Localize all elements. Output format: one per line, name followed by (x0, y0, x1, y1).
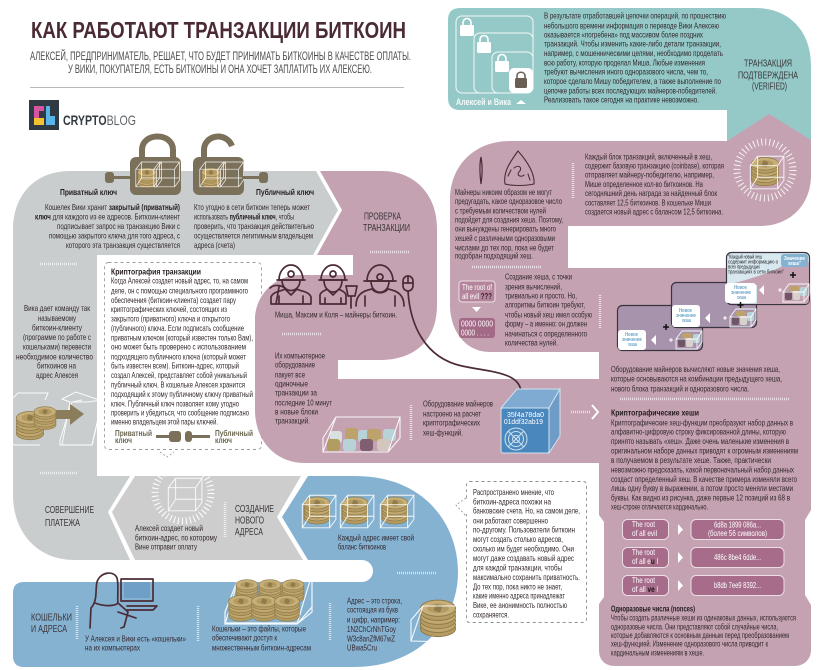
heading: transaction verified: ТРАНЗАКЦИЯ (744, 58, 792, 70)
text: hash creation (505, 273, 592, 348)
text: address string: UBwa5Cru (347, 644, 377, 653)
icon: root to zeros: 0000 0000 (461, 320, 493, 328)
text: verified explanation: транзакций. Чтобы изменить какие-либо детали транзакции, (544, 40, 721, 49)
heading: create new address (235, 503, 274, 538)
chart: hash chain: хеша (682, 318, 691, 324)
text: wallets on computers: У Алексея и Вики есть «кошельки» (85, 635, 186, 644)
text: miner hardware packs: последние 10 минут (275, 398, 332, 407)
chart: hash chain: Значение (784, 256, 805, 262)
panel: gray payment band (13, 171, 338, 560)
chart: hash chain: хеша" (788, 261, 802, 267)
text: equipment configured: хеш-функций. (423, 429, 463, 438)
text: miner hardware packs: транзакции за (275, 389, 317, 398)
text: verified explanation: Реализовать такое сегодня на практике невозможно. (544, 96, 699, 105)
text: miners guess: числами до тех пор, пока не будет (455, 243, 554, 252)
chart: hash chain: Новое (679, 308, 692, 314)
callout: misconception (456, 482, 586, 622)
heading: create new address: АДРЕСА (235, 526, 263, 538)
text: miner hardware packs: оборудование (275, 361, 315, 370)
heading: payment: ПЛАТЕЖА (45, 517, 80, 529)
text: hash creation: алгоритмы биткоин требуют, (505, 301, 585, 310)
chart: hash chain: транзакциях в сети биткоин" (728, 270, 784, 276)
text: nonces: кардинальным изменениям в хеше. (611, 648, 704, 657)
callout: misconception: могут создать столько адресов, (473, 535, 563, 544)
icon: closed lock with private key (105, 136, 181, 195)
logo: cryptoblog (29, 100, 136, 130)
card dashed border: cryptography (104, 262, 262, 450)
text: equipment configured (423, 400, 493, 438)
heading: verification (363, 210, 410, 234)
text: new address (135, 524, 218, 552)
callout: misconception: они работают совершенно (473, 516, 548, 525)
text: new address: биткоин-адрес, по которому (135, 534, 218, 543)
subtitle: У ВИКИ, ПОКУПАТЕЛЯ, ЕСТЬ БИТКОИНЫ И ОНА ХОЧЕТ ЗАПЛАТИТЬ ИХ АЛЕКСЕЮ. (68, 64, 372, 76)
chart: hash chain: значение (622, 337, 642, 343)
icon: mining chip cube: 01ddf32ab19 (504, 419, 543, 426)
text: cryptography card (111, 266, 253, 427)
text: private key: которого эта транзакция существляется (66, 241, 180, 250)
text: cryptography card: обеспечения (биткоин-клиента) создает пару (111, 296, 237, 305)
chart: hash chain: значение (731, 290, 751, 296)
text: cryptography card: подходящего публичного ключа (который может (111, 352, 246, 361)
text: verified explanation: цепочке работы всех последующих майнеров-победителей. (544, 86, 717, 95)
text: equipment computes (611, 365, 782, 394)
text: cryptography card: приватным ключом (который известен только Вам), (111, 334, 253, 343)
text: private key: Приватный ключ (60, 188, 117, 197)
heading: wallets: И АДРЕСА (31, 623, 67, 635)
text: miners guess: хешей с различными одноразовыми (455, 234, 555, 243)
icon: key pair: Приватный (115, 429, 152, 438)
text: verified explanation: которое сделало Мишу победителем, а также выполнение по (544, 77, 721, 86)
text: miners guess: подойдет для создания хеша. Поэтому, (455, 216, 563, 225)
text: private key: помощью закрытого ключа для того адреса, с (49, 232, 180, 240)
callout: misconception: максимально сохранить приватность. (473, 573, 580, 582)
text: miner hardware packs: в новые блоки (275, 408, 318, 417)
icon: coins moving to new address (8, 392, 102, 445)
text: cryptography card: именно владельцем этой пары ключей. (111, 418, 218, 427)
text: nonces: Одноразовые числа (nonces) (611, 604, 695, 614)
icon: root to zeros (459, 281, 495, 338)
text: coinbase: отправляет майнеру-победителю, например, (585, 171, 714, 180)
text: cryptography card: Когда Алексей создает новый адрес, то, на самом (111, 277, 248, 286)
callout: misconception: какие именно адреса принадлежат (473, 592, 565, 601)
text: vika command: биткоин-клиенту (32, 323, 83, 332)
text: coinbase: содержит базовую транзакцию (coinbase), которая (585, 162, 724, 171)
text: public key: использовать публичный ключ, чтобы (194, 212, 294, 222)
icon: root to zeros: all evil ??? (462, 292, 492, 301)
chart: hash chain: "Каждый новый хеш (728, 254, 762, 260)
text: cryptography card: подходящий к этому публичному ключу приватный (111, 390, 253, 399)
callout: misconception: по-другому. Пользователи биткоин (473, 526, 575, 535)
chart: hash examples: of all evil (632, 529, 657, 538)
text: miners guess: подобран подходящий хеш. (455, 251, 533, 260)
text: public key: осуществляется легитимным владельцем (194, 232, 313, 240)
text: cryptography card: закрытого (приватного) ключа и открытого (111, 314, 230, 323)
text: new address: Алексей создает новый (135, 524, 203, 533)
icon: mining chip cube: 35f4a78da0 (507, 412, 544, 419)
text: miners caption: Миша, Максим и Коля – майнеры биткоин. (275, 311, 397, 320)
callout: misconception: могут даже создавать новый адрес (473, 554, 574, 563)
text: miner hardware packs: одиночные (275, 380, 308, 389)
text: cryptography card: публичный ключ. В кошельке Алексея хранится (111, 380, 245, 389)
chart: hash examples: 6d8a 1899 086a... (714, 520, 761, 530)
text: vika command: необходимое количество (16, 352, 93, 361)
text: address string: 1N2ChCrNhTGoy (347, 625, 397, 634)
text: miners guess: они вынуждены генерировать много (455, 225, 556, 234)
callout: misconception: До тех пор, пока никто не знает, (473, 582, 562, 591)
text: vika command: Вика дает команду так (24, 304, 90, 313)
callout pointer (160, 452, 174, 457)
icon: miners (270, 265, 404, 308)
text: vika command: называемому (38, 314, 77, 323)
text: cryptographic hashes (611, 407, 798, 512)
callout: misconception: сохраняется. (473, 610, 509, 619)
text: coinbase (585, 152, 724, 217)
icon: wallet file coins (225, 574, 312, 624)
icon: key pair: ключ (115, 436, 132, 445)
text: wallets are files (212, 625, 311, 653)
text: cryptography card: деле, он с помощью специального программного (111, 286, 248, 295)
text: address string (347, 596, 402, 653)
text: wallets are files: множественным биткоин-адресам (212, 644, 311, 653)
text: wallets on computers (85, 635, 186, 653)
icon: sunburst empty cube (155, 462, 211, 521)
text: verified explanation (544, 12, 726, 105)
heading: verification: ПРОВЕРКА (364, 210, 401, 222)
text: each address balance: баланс биткоинов (338, 543, 386, 552)
text: vika command (16, 304, 93, 380)
callout: misconception: сколько им будет необходимо. Они (473, 545, 574, 554)
chart: hash chain: всех предыдущих (728, 264, 760, 270)
text: hash creation: количества нулей. (505, 339, 558, 348)
text: miner hardware packs: Их компьютерное (275, 351, 325, 360)
text: coinbase: составляет 12,5 биткоинов. В кошельке Миши (585, 199, 711, 208)
text: address string: W3c8anZfM67wZ (347, 635, 395, 644)
icon: key pair: Публичный (215, 428, 253, 438)
text: vika command: (программе по работе с (23, 333, 91, 342)
heading: wallets: КОШЕЛЬКИ (31, 612, 72, 624)
heading: transaction verified: (VERIFIED) (752, 80, 787, 92)
text: cryptographic hashes: хеш-строке отличаются кардинально. (611, 503, 708, 512)
text: verified explanation: небольшого времени информация о переводе Вики Алексею (544, 21, 719, 30)
heading: create new address: СОЗДАНИЕ (235, 503, 274, 515)
text: hash creation: чтобы новый хеш имел особую (505, 311, 592, 320)
chart: hash examples: of all eu l (632, 557, 658, 566)
icon: mouse and cable (403, 276, 521, 392)
heading: create new address: НОВОГО (235, 514, 264, 526)
text: public key: проверить, что транзакция действительно (194, 222, 314, 231)
text: hash creation: форму – а именно: он должен (505, 320, 587, 329)
heading: transaction verified (738, 58, 798, 92)
chart: hash chain: хеша (628, 342, 637, 348)
chart: hash examples: (более 56 символов) (708, 529, 767, 538)
icon: three coin balances (302, 495, 414, 528)
panel: mauve hashes (450, 114, 811, 666)
chart: hash examples: The root (632, 576, 656, 585)
text: address string: Адрес – это строка, (347, 596, 402, 605)
arrow: to hashes (592, 405, 598, 419)
text: cryptography card: проверить и убедиться, что сообщение подписано (111, 408, 249, 417)
text: equipment configured: Оборудование майнеров (423, 400, 493, 409)
icon: root to zeros: The root of (462, 283, 493, 292)
text: equipment computes: нового блока транзакций и одноразового числа. (611, 385, 749, 394)
chart: hash examples: of all ve l (632, 585, 658, 594)
text: private key: подписывает запрос на транзакцию Вики с (57, 222, 180, 231)
chart: hash chain: хеша (737, 295, 746, 301)
text: miners guess (455, 188, 563, 260)
text: address string: и цифр, например: (347, 616, 400, 625)
text: hash creation: Создание хеша, с точки (505, 273, 572, 282)
callout: misconception: Вике, ее анонимность полностью (473, 601, 567, 610)
text: each address balance (338, 534, 414, 552)
icon: key pair (115, 428, 253, 445)
chart: hash chain: Новое (625, 332, 638, 338)
text: verified explanation: всю работу, которую проделал Миша. Любые изменения (544, 58, 705, 67)
heading: payment: СОВЕРШЕНИЕ (45, 504, 94, 516)
chart: hash chain: Новое (734, 285, 747, 291)
text: verified explanation: например, с мошенническими целями, необходимо проделать (544, 49, 723, 58)
text: miner hardware packs: транзакций. (275, 417, 310, 426)
text: miner hardware packs (275, 351, 332, 426)
icon: block of coloured coins (323, 417, 400, 452)
text: miners guess: Майнеры никоим образом не могут (455, 188, 552, 197)
panel: teal verified (448, 8, 811, 145)
text: cryptography card: создал Алексей, представляет собой уникальный (111, 371, 247, 380)
text: public key: Публичный ключ (256, 187, 314, 197)
icon: open lock with public key (193, 137, 268, 195)
text: cryptography card: ключ. Публичный ключ позволяет кому угодно (111, 399, 239, 408)
icon: coin reward sunburst (737, 142, 793, 198)
text: wallets are files: Кошельки – это файлы, которые (212, 625, 306, 634)
text: hash creation: начинаться с определенного (505, 330, 587, 339)
text: cryptography card: быть известен всем). Биткоин-адрес, который (111, 362, 239, 371)
callout: misconception: для каждой транзакции, чтобы (473, 563, 562, 572)
text: vika command: биткоинов на (37, 362, 76, 371)
chart: hash examples: The root (632, 548, 656, 557)
callout: misconception: банковские счета. Но, на самом деле, (473, 507, 580, 516)
chart: hash examples: b8db 7ee9 8392... (714, 581, 761, 590)
heading: wallets (31, 612, 72, 635)
text: cryptography card: Криптография транзакции (111, 266, 201, 276)
chart: hash examples: 486c 8be4 6dde... (714, 553, 761, 562)
text: miners guess: предугадать, какое одноразовое число (455, 197, 562, 206)
callout: misconception: биткоин-адреса похожи на (473, 497, 551, 506)
panel: mauve verification (255, 171, 620, 463)
text: each address balance: Каждый адрес имеет свой (338, 534, 414, 543)
text: cryptography card: (публичного) ключа. Если подписать сообщение (111, 324, 244, 333)
text: coinbase: создается новый адрес с балансом 12,5 биткоина. (585, 208, 723, 217)
text: private key: Кошелек Вики хранит закрытый (приватный) (45, 203, 180, 212)
text: nonces (611, 604, 796, 657)
chart: hash chain: содержит информацию о (728, 260, 778, 266)
text: wallets on computers: на их компьютерах (85, 644, 140, 653)
chart: hash chain: значение (676, 313, 696, 319)
text: coinbase: сегодняшний день награда за найденный блок (585, 189, 717, 198)
icon: address coin (411, 600, 458, 642)
text: coinbase: Каждый блок транзакций, включенный в хеш, (585, 152, 712, 161)
subtitle: АЛЕКСЕЙ, ПРЕДПРИНИМАТЕЛЬ, РЕШАЕТ, ЧТО БУДЕТ ПРИНИМАТЬ БИТКОИНЫ В КАЧЕСТВЕ ОПЛАТЫ. (30, 50, 411, 63)
text: coinbase: Мише определенное кол-во биткоинов. На (585, 180, 703, 189)
heading: payment (45, 504, 94, 529)
text: equipment configured: криптографических (423, 419, 480, 428)
text: vika command: адрес Алексея (36, 371, 78, 380)
text: public key: Кто угодно в сети биткоин теперь может (194, 203, 310, 212)
text: hash creation: тривиально и просто. Но, (505, 292, 577, 301)
panel: blue wallets (13, 476, 458, 667)
chart: hash chain (618, 252, 810, 350)
heading: verification: ТРАНЗАКЦИИ (363, 222, 410, 234)
text: address string: состоящая из букв (347, 606, 398, 615)
icon: nested locks (456, 16, 533, 107)
text: miners guess: с требуемым количеством нулей (455, 206, 546, 215)
icon: key pair: ключ (215, 436, 232, 445)
text: cryptography card: криптографических ключей, состоящих из (111, 305, 227, 314)
chart: hash examples (622, 520, 784, 596)
text: cryptographic hashes: в получаемом в результате хеше. Также, практически (611, 456, 771, 465)
panel: gray new address chevron (112, 476, 303, 560)
text: verified explanation: оказывается «погребена» под массивом более поздних (544, 30, 703, 39)
chart: hash examples: The root (632, 520, 656, 529)
text: public key (194, 187, 314, 250)
title: КАК РАБОТАЮТ ТРАНЗАКЦИИ БИТКОИН (31, 17, 406, 43)
text: private key: ключ для каждого из ее адресов. Биткоин-клиент (35, 212, 180, 222)
text: cryptography card: оно может быть проверено с использованием (111, 343, 246, 352)
text: verified explanation: требуют вычисления иного одноразового числа, чем то, (544, 67, 708, 76)
text: new address: Вине отправит оплату (135, 543, 198, 552)
text: equipment configured: настроено на расчет (423, 410, 481, 419)
logo: cryptoblog: CRYPTOBLOG (63, 112, 136, 128)
icon: mining chip cube (501, 389, 560, 453)
text: private key (35, 188, 180, 250)
text: vika command: кошельками) перевести (23, 342, 91, 351)
subtitle (30, 50, 411, 76)
icon: nested locks: Алексей и Вика (456, 97, 512, 107)
callout: misconception: Распространено мнение, что (473, 488, 554, 497)
icon: woman at laptop (90, 573, 157, 628)
text: public key: адреса (счета) (194, 241, 235, 250)
text: hash creation: зрения вычислений, (505, 282, 562, 291)
text: miner hardware packs: пакует все (275, 370, 305, 379)
icon: needle and haystack (480, 151, 534, 186)
text: cryptographic hashes: Криптографические хеши (611, 407, 699, 417)
icon: root to zeros: 0000 . . . . (461, 328, 489, 338)
text: wallets are files: обеспечивают доступ к (212, 634, 277, 643)
text: verified explanation: В результате отработавшей цепочки операций, по прошествию (544, 12, 726, 21)
